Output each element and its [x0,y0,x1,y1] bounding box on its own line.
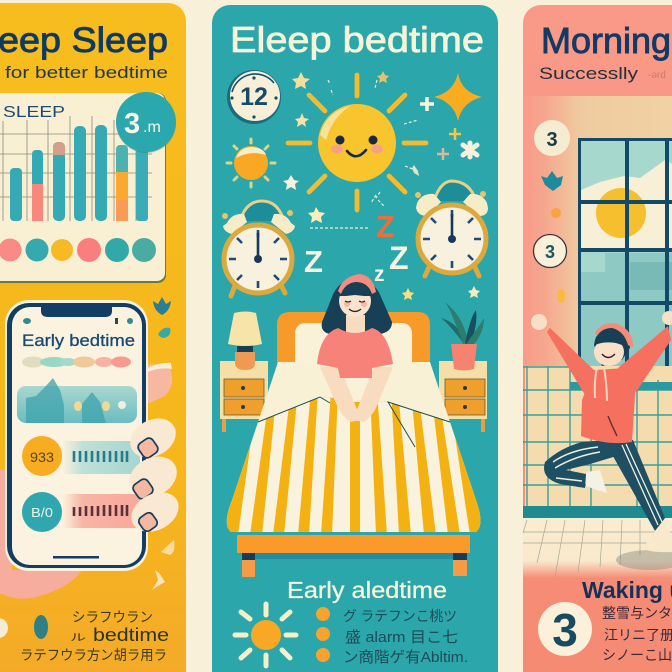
panel: bedtime [210,5,498,672]
list text: 盛 alarm 目こ七 [345,629,458,646]
potted plant [441,302,484,370]
number badge 3: 3 [552,604,578,656]
headband [338,274,376,294]
shoe left [586,470,607,493]
face [344,301,367,312]
striped blanket [226,396,480,532]
heading: bedtime: Eleep bedtime [230,19,484,60]
panel background teal [212,5,498,672]
phone notch [41,305,112,317]
person sitting in bed [317,274,393,422]
icon: four point star [434,73,482,121]
icons: z letters: Z [304,244,323,279]
fingers [122,411,186,540]
neck [346,315,365,333]
shoe right [642,520,672,552]
bed frame [237,535,470,577]
row 2: B/0 [31,505,53,520]
pillow [295,323,412,380]
row 2 [22,492,140,532]
legend dots [0,238,156,262]
row 1 [22,436,140,476]
badge: 3 minutes [116,92,176,153]
icons: z letters: Z [389,240,409,276]
table lamp [228,312,262,370]
status icons [23,318,133,324]
floor [523,518,672,578]
head [339,285,371,317]
list text: ン商階ゲ有Abltim. [343,649,468,666]
icon: left alarm clock [222,201,295,296]
chart label: SLEEP [3,104,65,121]
side badge 3: 3 [546,129,558,151]
icon: wall clock 12 [227,70,281,124]
caption text [602,605,672,663]
panel background yellow [0,3,186,672]
torso shirt [317,328,393,378]
subheading: for better bedtime [5,63,168,82]
row 1: 933 [30,449,54,465]
lap [338,376,376,402]
face [594,331,628,366]
person jumping [531,311,672,552]
icon: small sun [227,139,275,187]
faint text: -ərd [648,70,666,81]
chart card [0,92,176,283]
icons: small decorations [0,297,174,639]
caption text [20,609,169,663]
heading: morning: Morning [541,20,671,61]
hands [531,311,672,330]
right arm [618,326,671,392]
icon: big smiling sun [288,75,426,210]
icon: orange dot [551,208,561,218]
panel: morning [523,5,672,672]
nightstand right [439,361,487,432]
icon: right alarm clock [415,181,488,276]
panel background pink [523,5,672,672]
badge: 3 minutes: .m [143,119,161,136]
hair [322,280,392,334]
arms [320,367,362,422]
wall tiles [523,366,672,506]
icon: bottom sun [235,604,296,666]
standing leg [605,440,665,531]
sleep wave chart [17,378,137,423]
window [578,138,672,382]
phone [5,300,148,571]
icons: z letters: Z [376,209,395,244]
blanket fold [258,397,450,447]
cloud [581,160,672,250]
nightstand left [220,361,268,432]
pocket [608,416,617,436]
number badge 3 [538,602,592,656]
floor shadow [616,550,672,570]
subheading: Successlly [539,64,639,83]
caption text: bedtime [93,625,169,645]
phone heading: Early bedtime [22,331,135,350]
hoodie [581,368,636,443]
caption text: ラテフウラ方ン胡ラ用ラ [20,647,167,663]
subheading: early bedtime: Early aledtime [287,577,447,603]
icon: yellow drop [557,289,565,303]
raised leg [544,440,620,488]
building [581,253,672,366]
side badge 2: 3 [545,242,555,262]
headband [595,323,633,348]
hair [594,327,630,366]
icons: z letters [304,209,409,286]
room wall [523,96,672,368]
icons: sparkles [283,71,480,300]
headboard [277,312,430,365]
icon: hand holding phone [0,300,186,599]
window sill [570,382,672,390]
illustration: bed scene [210,274,495,577]
baseboard [523,506,672,518]
icon: teal flower [541,171,563,191]
left arm [547,328,596,395]
coloured strip [22,356,131,368]
heading: deep sleep: eep Sleep [0,21,168,60]
home indicator [53,556,99,558]
list bullets [316,607,330,662]
icon: wall clock 12: 12 [240,83,268,111]
sun face [331,136,383,156]
panel: sleep tracking [0,3,186,672]
list text: グ ラテフンこ桃ツ [343,608,457,624]
icons: z letters: z [374,263,384,286]
badge: 3 minutes: 3 [124,108,140,140]
side badge 2 [534,234,566,268]
caption text: シラフウラン [72,609,153,625]
bed sheet [258,362,450,422]
hoodie strings [595,368,607,401]
bar chart [10,125,148,221]
morning sun [596,188,646,238]
caption text: ル [70,633,86,644]
list text [343,608,468,666]
side badge 3 [534,120,570,156]
